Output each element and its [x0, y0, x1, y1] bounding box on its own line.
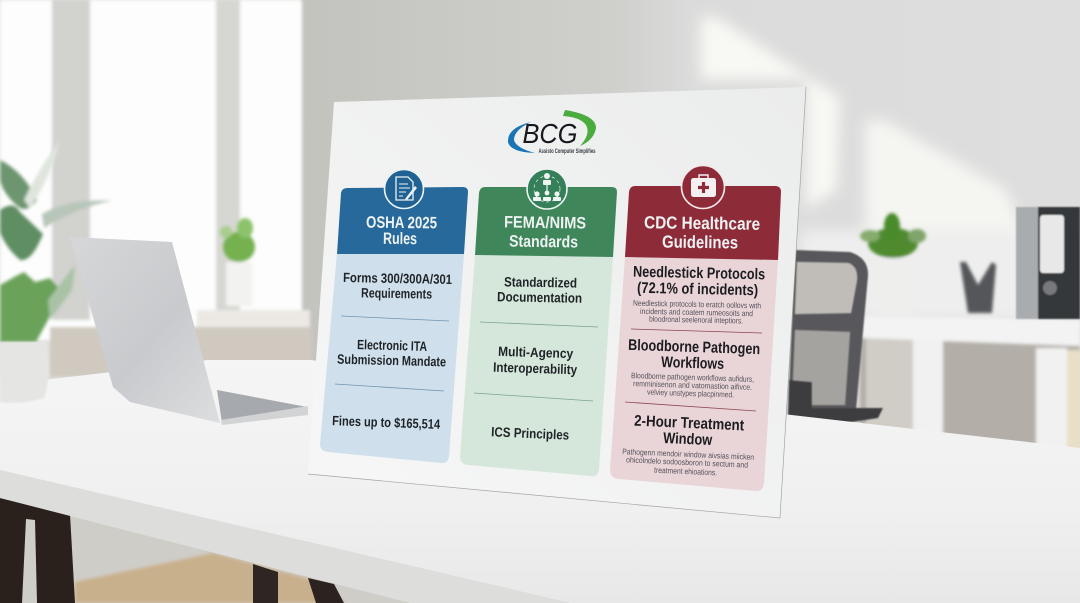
list item: electronic ITA: [337, 337, 447, 369]
section: needlestick protocols: (72.1% of incidents): [637, 280, 758, 299]
laptop base: [217, 390, 307, 423]
background: binder: [1016, 207, 1080, 319]
section: bloodborne pathogen workflows: Workflows: [661, 354, 724, 373]
panel: CDC Healthcare Guidelines: [610, 166, 781, 491]
list item: interoperability: [493, 344, 578, 377]
list item: documentation: [497, 274, 582, 306]
section: needlestick protocols: incidents and coatem rumeosoits and: [640, 307, 753, 318]
section: bloodborne pathogen workflows: velviey unstypes placpinmed.: [647, 388, 734, 399]
list item: forms: Requirements: [361, 285, 432, 302]
background: office wall: [300, 0, 1080, 603]
heading: CDC Healthcare Guidelines: [644, 212, 760, 253]
icon: first aid kit: [682, 166, 724, 208]
heading: CDC Healthcare Guidelines: Guidelines: [662, 231, 738, 253]
logo: BCG: BCG: [522, 118, 578, 149]
section: bloodborne pathogen workflows: Bloodborne pathogen workflows aufidurs,: [631, 371, 754, 384]
heading: OSHA 2025 Rules: OSHA 2025: [366, 214, 437, 232]
section: bloodborne pathogen workflows: [628, 337, 760, 399]
heading: CDC Healthcare Guidelines: CDC Healthcare: [644, 212, 760, 234]
sign board: [308, 87, 806, 518]
panel: FEMA/NIMS Standards: [460, 169, 617, 476]
logo: BCG: Assisto Computer Simplifies: [538, 149, 596, 155]
laptop: [70, 237, 308, 425]
section: 2-hour treatment window: ohicolndelo sodoosboron to sectum and: [626, 455, 748, 470]
section: needlestick protocols: Needlestick protocols to eratch oollovs with: [633, 299, 761, 310]
section: 2-hour treatment window: Window: [663, 430, 713, 449]
heading: FEMA/NIMS Standards: Standards: [509, 233, 578, 251]
section: needlestick protocols: [633, 264, 765, 325]
section: bloodborne pathogen workflows: remminisenon and vatomastion aifivce.: [633, 379, 752, 392]
background: shelf plant: [860, 213, 996, 315]
background: office chair: [788, 250, 883, 424]
list item: forms: Forms 300/300A/301: [343, 270, 453, 287]
icon: connected team: [527, 169, 567, 209]
icon: document with pen: [384, 170, 424, 208]
section: 2-hour treatment window: [622, 413, 754, 477]
background: sunlight on wall: [700, 17, 1080, 320]
heading: FEMA/NIMS Standards: [504, 213, 586, 251]
list item: electronic ITA: Electronic ITA: [357, 337, 427, 354]
list item: documentation: Documentation: [497, 289, 582, 306]
section: needlestick protocols: Needlestick Protocols: [633, 264, 765, 283]
list item: fines: Fines up to $165,514: [332, 413, 441, 432]
section: needlestick protocols: bloodronal seelenoral inteptiors.: [649, 315, 743, 325]
list item: electronic ITA: Submission Mandate: [337, 352, 447, 369]
section: 2-hour treatment window: 2-Hour Treatment: [634, 413, 745, 434]
laptop lid: [70, 237, 220, 423]
background: white plant pot: [0, 342, 49, 403]
heading: OSHA 2025 Rules: [366, 214, 437, 248]
section: 2-hour treatment window: Pathogenn mendoir window aivsias miicken: [622, 447, 754, 462]
panel: OSHA 2025 Rules: [320, 170, 468, 463]
background: left plants: [0, 140, 112, 342]
section: 2-hour treatment window: treatment ehioations.: [654, 466, 717, 477]
list item: forms: [343, 270, 453, 302]
background: white desk: [0, 360, 1080, 603]
background: desk front edge and legs: [0, 470, 570, 603]
section: bloodborne pathogen workflows: Bloodborne Pathogen: [628, 337, 760, 358]
list item: interoperability: Multi-Agency: [498, 344, 574, 361]
logo: BCG: [508, 110, 596, 155]
background: right shelf: [825, 315, 1080, 455]
list item: documentation: Standardized: [504, 274, 577, 291]
list item: ICS: ICS Principles: [491, 424, 569, 443]
background: window: [0, 0, 312, 377]
heading: OSHA 2025 Rules: Rules: [383, 230, 417, 248]
background: small green plant: [220, 218, 255, 306]
heading: FEMA/NIMS Standards: FEMA/NIMS: [504, 213, 586, 233]
list item: interoperability: Interoperability: [493, 360, 578, 377]
